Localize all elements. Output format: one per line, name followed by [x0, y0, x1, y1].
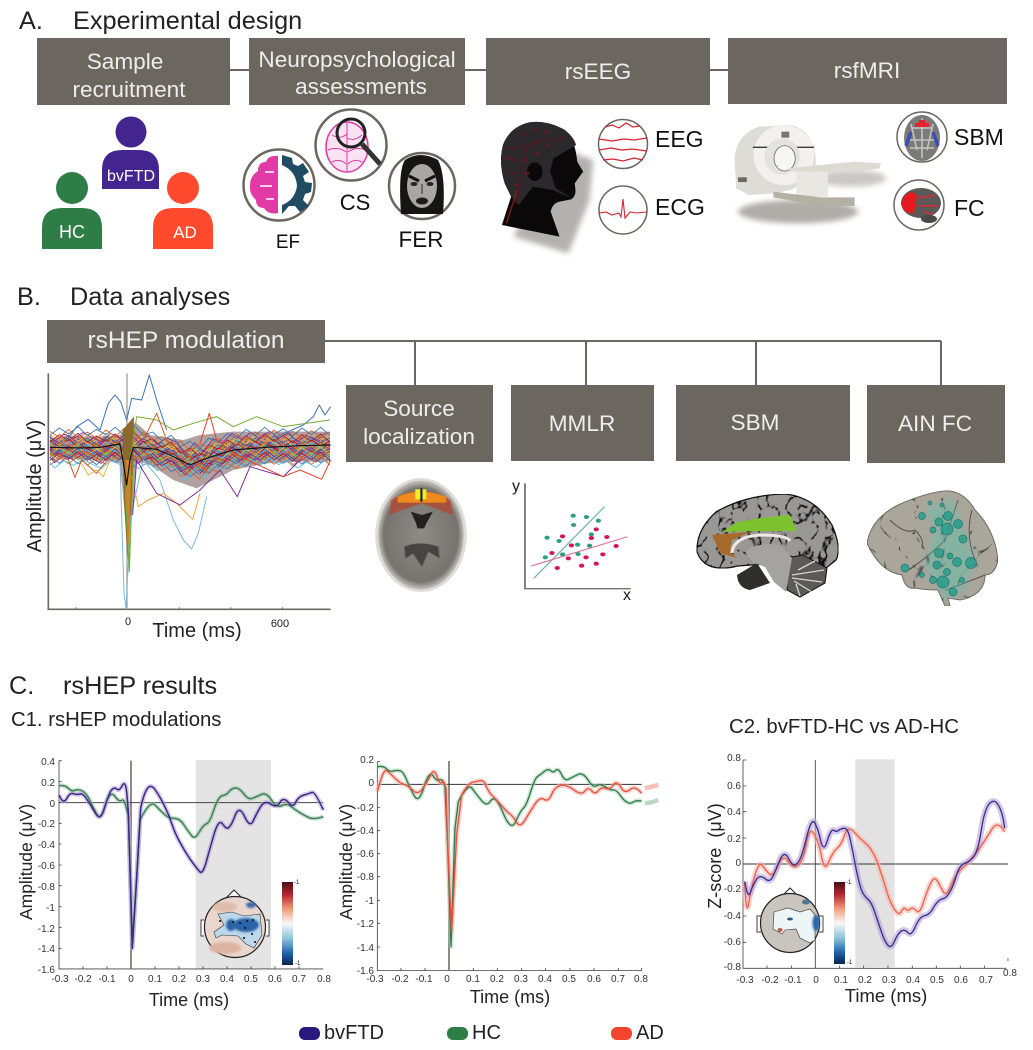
box: MMLR: MMLR — [549, 411, 615, 436]
box: SBM: SBM — [731, 410, 779, 435]
label: ECG: ECG — [655, 194, 705, 220]
chart: C1 AD vs HC: -0.4 — [357, 826, 374, 837]
colorbar: C1 — [282, 880, 301, 967]
chart: C2 z-score comparison: 0.4 — [727, 807, 741, 818]
image: AIN functional connectivity brain — [867, 491, 998, 606]
axis label: C1 amplitude: Amplitude (μV) — [16, 804, 36, 920]
chart: C1 AD vs HC: 0.5 — [562, 974, 576, 985]
icon: EEG traces in circle — [598, 120, 648, 168]
icon: executive function brain and gear — [244, 150, 314, 220]
chart: MMLR scatter plot — [525, 483, 631, 589]
label: FC: FC — [954, 195, 985, 221]
box: MMLR — [511, 385, 654, 461]
axis label: Time (ms): Time (ms) — [152, 620, 242, 642]
chart: C2 z-score comparison: -0.6 — [724, 937, 741, 948]
legend: bvFTD: bvFTD — [324, 1022, 384, 1044]
chart: C2 z-score comparison: -0.2 — [761, 975, 779, 986]
chart: C1 bvFTD vs HC: 0 — [49, 799, 55, 810]
chart: C1 bvFTD vs HC: -1 — [46, 903, 55, 914]
heading: C. rsHEP results: rsHEP results — [63, 672, 217, 700]
chart: C1 bvFTD vs HC: -0.6 — [38, 861, 55, 872]
heading: B. Data analyses: Data analyses — [70, 283, 230, 311]
box: rsHEP modulation — [47, 320, 325, 363]
axis label: z-score: Z-score (μV) — [705, 803, 725, 909]
colorbar: C2: -1 — [847, 960, 853, 966]
chart: C1 bvFTD vs HC: 0.2 — [41, 778, 55, 789]
chart: C1 bvFTD vs HC: -0.2 — [38, 819, 55, 830]
chart: C1 AD vs HC: -1.6 — [357, 966, 374, 977]
label: EEG: EEG — [655, 126, 704, 152]
icon: bvFTD person — [102, 116, 159, 189]
box: sample recruitment — [37, 38, 230, 105]
chart: C1 bvFTD vs HC: 0.2 — [172, 974, 186, 985]
box: rsfMRI — [728, 38, 1007, 104]
chart: C2 z-score comparison: 0.7 — [979, 975, 993, 986]
chart: C1 AD vs HC: 0.4 — [538, 974, 552, 985]
chart: C1 AD vs HC: -0.6 — [357, 849, 374, 860]
chart: C2 z-score comparison: 0.5 — [930, 975, 944, 986]
chart: C2 z-score comparison: -0.3 — [736, 975, 754, 986]
box: neuropsychological assessments: Neuropsychological — [258, 47, 456, 72]
label: CS: CS — [340, 190, 370, 215]
label: FER: FER — [398, 227, 444, 252]
x tick 600: 600 — [271, 618, 289, 630]
chart: C2 z-score comparison: 0 — [813, 975, 819, 986]
colorbar: C1: -1 — [295, 961, 301, 967]
box: sample recruitment: recruitment — [72, 77, 186, 102]
legend: HC — [447, 1022, 501, 1044]
icon: HC person: HC — [59, 222, 85, 242]
chart: C2 z-score comparison — [724, 753, 1017, 986]
scalp topography: C2 — [757, 888, 823, 952]
subheading: C1: C1. rsHEP modulations — [11, 709, 221, 731]
chart: C1 AD vs HC: 0.1 — [466, 974, 480, 985]
box: rsHEP modulation: rsHEP modulation — [87, 327, 285, 354]
connector lines between design boxes — [228, 69, 730, 71]
chart: C1 bvFTD vs HC: 0 — [128, 974, 134, 985]
label: y axis: y — [512, 478, 520, 495]
legend: AD — [611, 1022, 664, 1044]
chart: C2 z-score comparison: 0.3 — [882, 975, 896, 986]
chart: C1 bvFTD vs HC: -1.6 — [38, 965, 55, 976]
chart: C2 z-score comparison: 0.6 — [954, 975, 968, 986]
chart: C1 bvFTD vs HC: -0.1 — [98, 974, 116, 985]
chart: C2 z-score comparison: 0.8 — [1003, 968, 1017, 979]
chart: C1 AD vs HC: -0.2 — [357, 803, 374, 814]
box: AIN FC — [867, 385, 1005, 463]
chart: C1 bvFTD vs HC: 0.7 — [292, 974, 306, 985]
chart: C1 bvFTD vs HC: 0.1 — [148, 974, 162, 985]
chart: C1 bvFTD vs HC: 0.4 — [41, 757, 55, 768]
chart: C1 AD vs HC: 0.2 — [360, 755, 374, 766]
chart: C1 AD vs HC: 0.6 — [587, 974, 601, 985]
chart: C2 z-score comparison: 0.1 — [834, 975, 848, 986]
chart: C2 z-score comparison: -0.4 — [724, 911, 741, 922]
box: rsEEG: rsEEG — [565, 59, 631, 84]
chart: butterfly plot of rsHEP — [48, 373, 331, 609]
chart: C2 z-score comparison: 0.2 — [727, 834, 741, 845]
chart: C2 z-score comparison: -0.1 — [784, 975, 802, 986]
chart: C1 AD vs HC: -0.3 — [366, 974, 384, 985]
chart: C1 AD vs HC: -1.4 — [357, 943, 374, 954]
heading: A. Experimental design: A. — [19, 7, 43, 35]
scalp topography: C1 — [201, 890, 269, 958]
x tick 0: 0 — [125, 616, 131, 628]
box: source localization: localization — [363, 424, 475, 449]
icon: facial emotion recognition face — [389, 153, 455, 219]
chart: C1 bvFTD vs HC: -0.8 — [38, 882, 55, 893]
chart: C1 AD vs HC: 0 — [368, 778, 374, 789]
box: AIN FC: AIN FC — [898, 411, 972, 436]
chart: C1 bvFTD vs HC: -0.4 — [38, 840, 55, 851]
box: sample recruitment: Sample — [87, 49, 163, 74]
chart: C1 bvFTD vs HC — [38, 757, 331, 985]
chart: C2 z-score comparison: -0.2 — [724, 884, 741, 895]
image: source localization axial brain — [376, 478, 466, 592]
chart: C1 bvFTD vs HC: -0.3 — [51, 974, 69, 985]
box: source localization: Source — [383, 396, 455, 421]
label: EF: EF — [276, 232, 300, 253]
heading: B. Data analyses: B. — [17, 283, 41, 311]
icon: cognitive screening brain under magnifier — [316, 110, 386, 180]
heading: C. rsHEP results: C. — [9, 672, 34, 700]
chart: C1 AD vs HC: -0.8 — [357, 872, 374, 883]
legend: HC: HC — [472, 1022, 501, 1044]
icon: MRI scanner — [734, 125, 886, 223]
box: neuropsychological assessments — [249, 38, 465, 105]
axis label: Amplitude (µV): Amplitude (μV) — [24, 420, 46, 552]
heading: A. Experimental design: Experimental design — [73, 7, 302, 35]
chart: C1 AD vs HC: 0 — [444, 974, 450, 985]
chart: C1 AD vs HC: -1 — [365, 896, 374, 907]
box: SBM — [676, 385, 850, 461]
subheading: C2: C2. bvFTD-HC vs AD-HC — [729, 716, 959, 738]
chart: C1 AD vs HC: 0.8 — [634, 974, 648, 985]
legend: AD: AD — [636, 1022, 664, 1044]
icon: head with EEG cap — [501, 122, 593, 253]
box: rsfMRI: rsfMRI — [834, 58, 900, 83]
label: x axis: x — [623, 587, 631, 604]
chart: C2 z-score comparison: 0.4 — [906, 975, 920, 986]
chart: C1 AD vs HC — [357, 755, 658, 985]
chart: C1 AD vs HC: 0.7 — [611, 974, 625, 985]
axis label: second time: Time (ms) — [470, 987, 550, 1007]
icon: AD person: AD — [173, 223, 197, 242]
chart: C1 AD vs HC: 0.3 — [514, 974, 528, 985]
icon: bvFTD person: bvFTD — [107, 168, 155, 185]
chart: C1 AD vs HC: -0.1 — [415, 974, 433, 985]
icon: functional connectivity brain in circle — [894, 180, 944, 230]
icon: AD person — [153, 172, 213, 249]
axis label: second amplitude: Amplitude (μV) — [336, 804, 356, 920]
chart: C1 bvFTD vs HC: -0.2 — [74, 974, 92, 985]
colorbar: C2: -1 — [846, 880, 852, 886]
box: rsEEG — [486, 38, 710, 105]
chart: C1 bvFTD vs HC: 0.6 — [268, 974, 282, 985]
chart: C1 bvFTD vs HC: 0.8 — [317, 974, 331, 985]
colorbar: C1: -1 — [294, 880, 300, 886]
connector tree from rsHEP modulation — [325, 341, 941, 385]
chart: C2 z-score comparison: 0.6 — [727, 781, 741, 792]
colorbar: C2 — [834, 880, 853, 966]
chart: C1 bvFTD vs HC: 0.5 — [244, 974, 258, 985]
chart: C1 bvFTD vs HC: 0.4 — [220, 974, 234, 985]
chart: C1 AD vs HC: -1.2 — [357, 919, 374, 930]
label: SBM: SBM — [954, 124, 1004, 150]
chart: C1 bvFTD vs HC: 0.3 — [196, 974, 210, 985]
icon: HC person — [42, 172, 102, 249]
box: neuropsychological assessments: assessments — [295, 74, 427, 99]
chart: C1 AD vs HC: -0.2 — [391, 974, 409, 985]
chart: C2 z-score comparison: -0.8 — [724, 962, 741, 973]
axis label: C2 time: Time (ms) — [845, 985, 927, 1006]
chart: C1 bvFTD vs HC: -1.2 — [38, 924, 55, 935]
chart: C1 AD vs HC: 0.2 — [490, 974, 504, 985]
icon: SBM brain slice in circle — [897, 112, 947, 162]
chart: C2 z-score comparison: 0.8 — [727, 753, 741, 764]
chart: C1 bvFTD vs HC: -1.4 — [38, 944, 55, 955]
icon: ECG trace in circle — [599, 186, 647, 234]
chart: C2 z-score comparison: 0.2 — [858, 975, 872, 986]
chart: C2 z-score comparison: 0 — [735, 858, 741, 869]
image: SBM sagittal brain — [697, 494, 838, 597]
box: source localization — [346, 385, 493, 462]
axis label: C1 time: Time (ms) — [149, 990, 229, 1010]
